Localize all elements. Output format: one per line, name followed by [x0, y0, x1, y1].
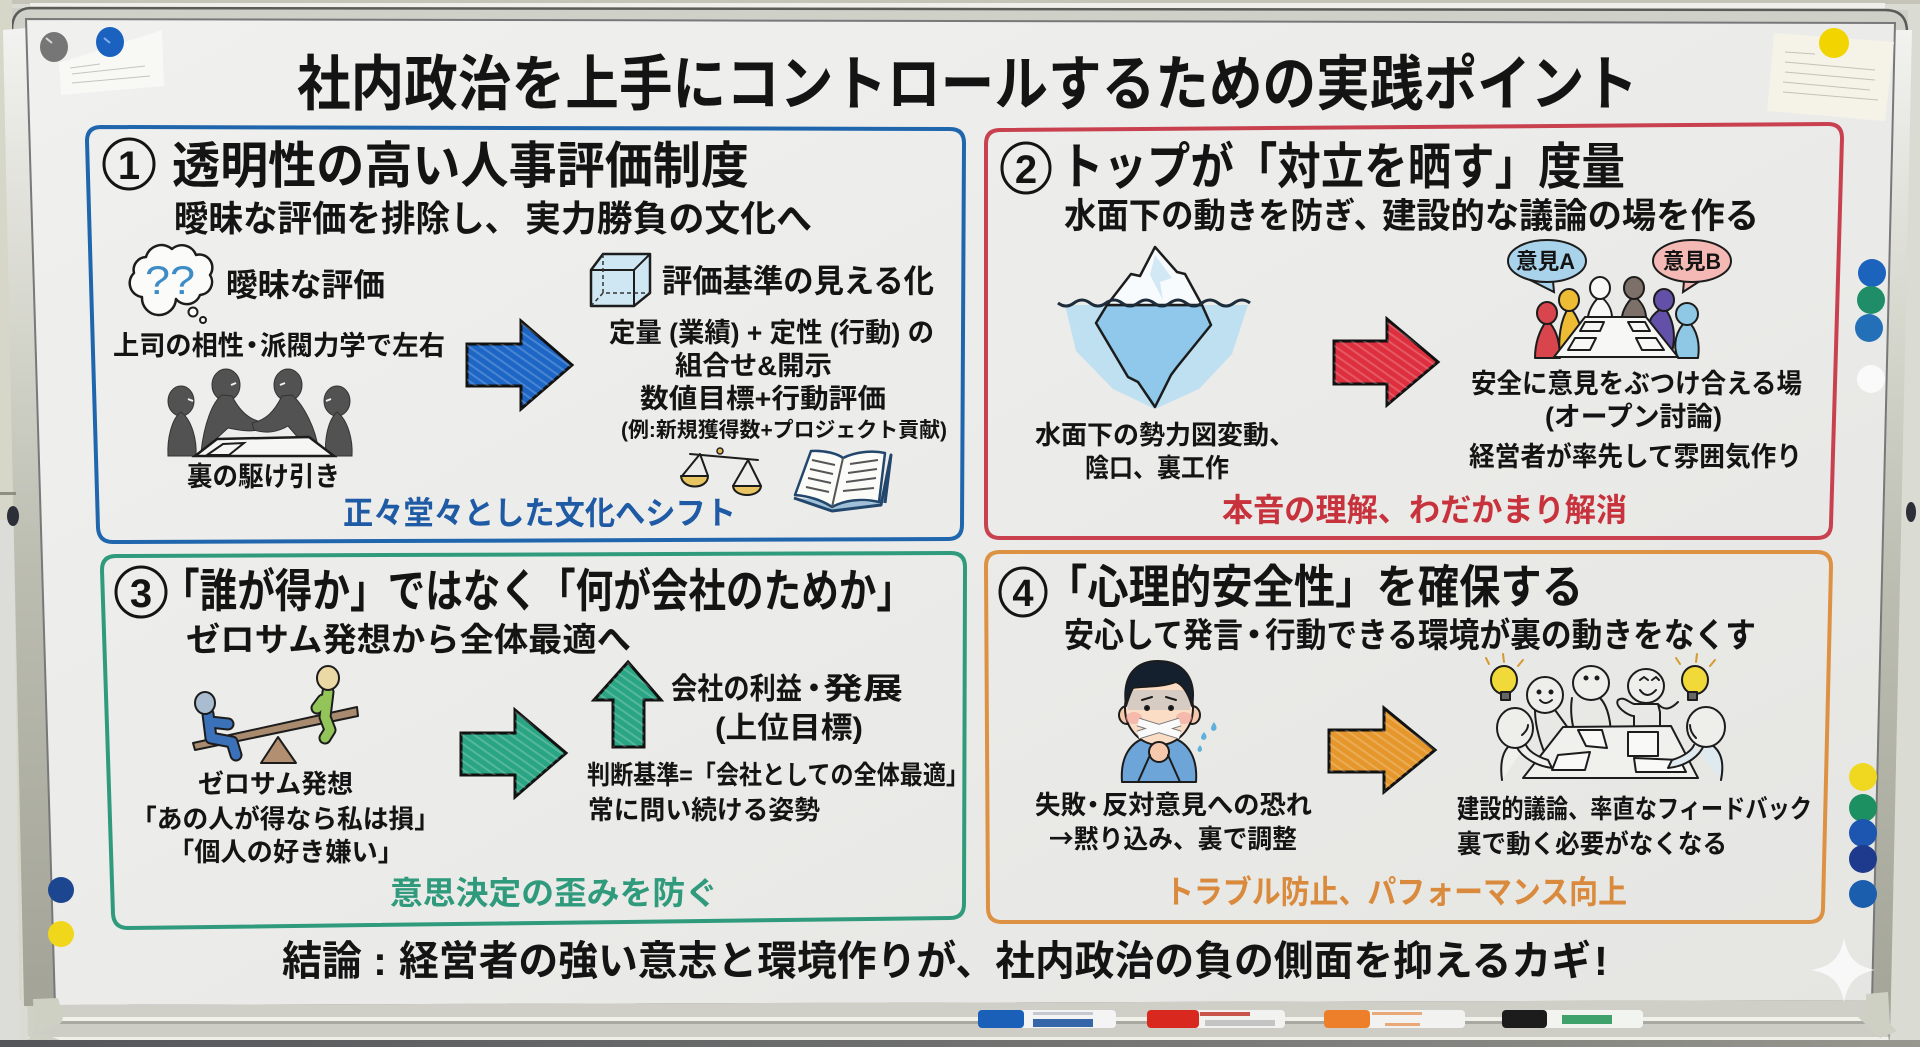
subheading 4	[1064, 616, 1756, 655]
text leader sets atmosphere: 経営者が率先して雰囲気作り	[1469, 441, 1802, 472]
arrow blue	[467, 321, 572, 409]
number badge 3: 3	[130, 572, 152, 616]
subheading 2: 建設的な議論の場を作る	[1382, 197, 1759, 236]
text criteria: 判断基準=「会社としての全体最適」	[587, 760, 969, 790]
icon: thought cloud with question marks: ??	[145, 259, 195, 303]
icon: light bulb right	[1676, 654, 1715, 700]
icon: happy team at table	[1486, 654, 1725, 780]
green magnet right	[1857, 286, 1885, 314]
icon: balance scale	[681, 448, 761, 495]
text fear of failure: 反対意見への恐れ	[1102, 790, 1312, 820]
panel 1 border	[87, 127, 964, 542]
text below water: 水面下の勢力図変動、	[1035, 420, 1295, 450]
icon: cube	[591, 254, 650, 306]
panel 1: transparent evaluation	[87, 127, 964, 542]
number badge 2: 2	[1015, 148, 1037, 192]
text silent: →黙り込み、裏で調整	[1049, 819, 1297, 856]
green magnet lower right	[1849, 794, 1877, 822]
subheading 4: 行動できる環境が裏の動きをなくす	[1265, 616, 1756, 655]
pinned note right	[1767, 33, 1894, 121]
text example: (例:新規獲得数+プロジェクト貢献)	[621, 419, 947, 442]
icon: shadow figures shaking hands	[168, 369, 352, 456]
opinion bubble A: 意見A	[1516, 249, 1575, 274]
blue magnet bottom right	[1849, 880, 1877, 908]
opinion bubble B: 意見B	[1663, 249, 1721, 274]
marker red	[1147, 1010, 1285, 1028]
text company profit: 発展	[823, 673, 903, 706]
icon: seesaw	[193, 666, 358, 763]
gray magnet	[40, 32, 68, 62]
conclusion: 結論	[282, 938, 362, 984]
wall bracket right	[1906, 502, 1916, 522]
conclusion: !	[1594, 938, 1608, 984]
heading 4: 「心理的安全性」を確保する	[1046, 561, 1583, 613]
takeaway 2: 本音の理解、わだかまり解消	[1222, 492, 1627, 528]
number badge 4: 4	[1012, 573, 1034, 615]
text backbiting: 陰口、裏工作	[1085, 453, 1229, 483]
wall bracket left	[0, 492, 19, 526]
icon: sparkle watermark	[1811, 938, 1875, 1002]
pinned note left	[59, 30, 164, 95]
label vague evaluation: 曖昧な評価	[226, 267, 385, 303]
blue magnet right 1	[1858, 259, 1886, 287]
conclusion: 経営者の強い意志と環境作りが、社内政治の負の側面を抑えるカギ	[399, 938, 1591, 984]
subheading 3: ゼロサム発想から全体最適へ	[186, 621, 631, 658]
text open discussion: (オープン討論)	[1545, 402, 1722, 432]
panel 4 border	[986, 552, 1831, 922]
yellow magnet	[1819, 28, 1849, 58]
marker tray	[0, 992, 1920, 1047]
marker blue	[978, 1010, 1116, 1028]
marker black	[1502, 1010, 1643, 1028]
opinion bubble A	[1508, 240, 1586, 292]
text combine and disclose: 組合せ&開示	[675, 351, 832, 381]
number badge 4	[1000, 568, 1046, 616]
text zero-sum: ゼロサム発想	[198, 769, 353, 799]
number badge 1: 1	[118, 144, 140, 188]
heading 1: 透明性の高い人事評価制度	[172, 138, 749, 194]
number badge 3	[116, 567, 166, 617]
arrow green up	[594, 662, 661, 747]
number badge 2	[1002, 143, 1050, 193]
heading 2: トップが「対立を晒す」度量	[1060, 139, 1625, 195]
subheading 4: 安心して発言	[1064, 617, 1243, 655]
navy magnet lower right	[1849, 845, 1877, 873]
takeaway 3: 意思決定の歪みを防ぐ	[390, 875, 718, 911]
text company profit: 会社の利益	[671, 673, 802, 706]
text boss affinity: ・	[238, 331, 266, 361]
takeaway 4: トラブル防止、パフォーマンス向上	[1165, 874, 1627, 910]
white magnet right	[1857, 365, 1885, 393]
text numeric targets: 数値目標+行動評価	[640, 384, 886, 414]
blue magnet right 2	[1855, 314, 1883, 342]
icon: people around table	[1535, 277, 1699, 358]
text keep asking: 常に問い続ける姿勢	[588, 795, 820, 825]
title: 社内政治を上手にコントロールするための実践ポイント	[297, 51, 1638, 118]
subheading 1	[174, 198, 812, 239]
panel 2: exposing conflict	[986, 124, 1842, 538]
text fear of failure: 失敗	[1035, 790, 1086, 820]
text quote loss: 「あの人が得なら私は損」	[131, 804, 440, 834]
subheading 1: 実力勝負の文化へ	[525, 198, 812, 239]
yellow magnet lower right	[1849, 763, 1877, 791]
arrow green	[461, 710, 566, 797]
subheading 2: 水面下の動きを防ぎ、	[1064, 197, 1386, 236]
text constructive debate: 建設的議論、率直なフィードバック	[1457, 794, 1812, 824]
label criteria visibility: 評価基準の見える化	[662, 263, 934, 299]
blue magnet lower right	[1849, 819, 1877, 847]
arrow orange	[1329, 708, 1435, 792]
text company profit	[671, 673, 903, 706]
number badge 1	[104, 139, 154, 189]
icon: open book	[794, 451, 891, 511]
yellow magnet left	[48, 921, 74, 947]
text boss affinity	[113, 331, 445, 361]
navy magnet left	[48, 877, 74, 903]
blue magnet	[96, 27, 124, 57]
subheading 1: 曖昧な評価を排除し、	[174, 198, 519, 239]
icon: light bulb left	[1486, 654, 1523, 700]
arrow red	[1334, 319, 1438, 405]
text quantitative plus qualitative: 定量 (業績) + 定性 (行動) の	[609, 318, 934, 348]
subheading 4: ・	[1237, 617, 1271, 655]
text boss affinity: 派閥力学で左右	[260, 331, 445, 361]
panel 4: psychological safety	[986, 552, 1831, 922]
icon: iceberg	[1058, 247, 1250, 409]
opinion bubble B	[1653, 240, 1731, 292]
marker orange	[1324, 1010, 1465, 1028]
text boss affinity: 上司の相性	[113, 331, 244, 361]
icon: boy with taped mouth	[1119, 661, 1216, 782]
text fear of failure: ・	[1080, 790, 1106, 820]
icon: thought cloud with question marks	[130, 245, 212, 323]
text higher goal: (上位目標)	[715, 712, 863, 745]
panel 2 border	[986, 124, 1842, 538]
text company profit: ・	[799, 673, 829, 706]
heading 3: 「誰が得か」ではなく「何が会社のためか」	[162, 565, 914, 617]
text quote likes: 「個人の好き嫌い」	[168, 837, 404, 867]
text safe place: 安全に意見をぶつけ合える場	[1471, 369, 1802, 399]
panel 3: what is good for the company	[102, 553, 969, 928]
conclusion: :	[373, 938, 387, 984]
text no need to act behind: 裏で動く必要がなくなる	[1457, 829, 1727, 859]
panel 3 border	[102, 553, 965, 928]
takeaway 1: 正々堂々とした文化へシフト	[343, 495, 736, 531]
subheading 2	[1064, 197, 1759, 236]
label back room deals: 裏の駆け引き	[187, 462, 340, 492]
